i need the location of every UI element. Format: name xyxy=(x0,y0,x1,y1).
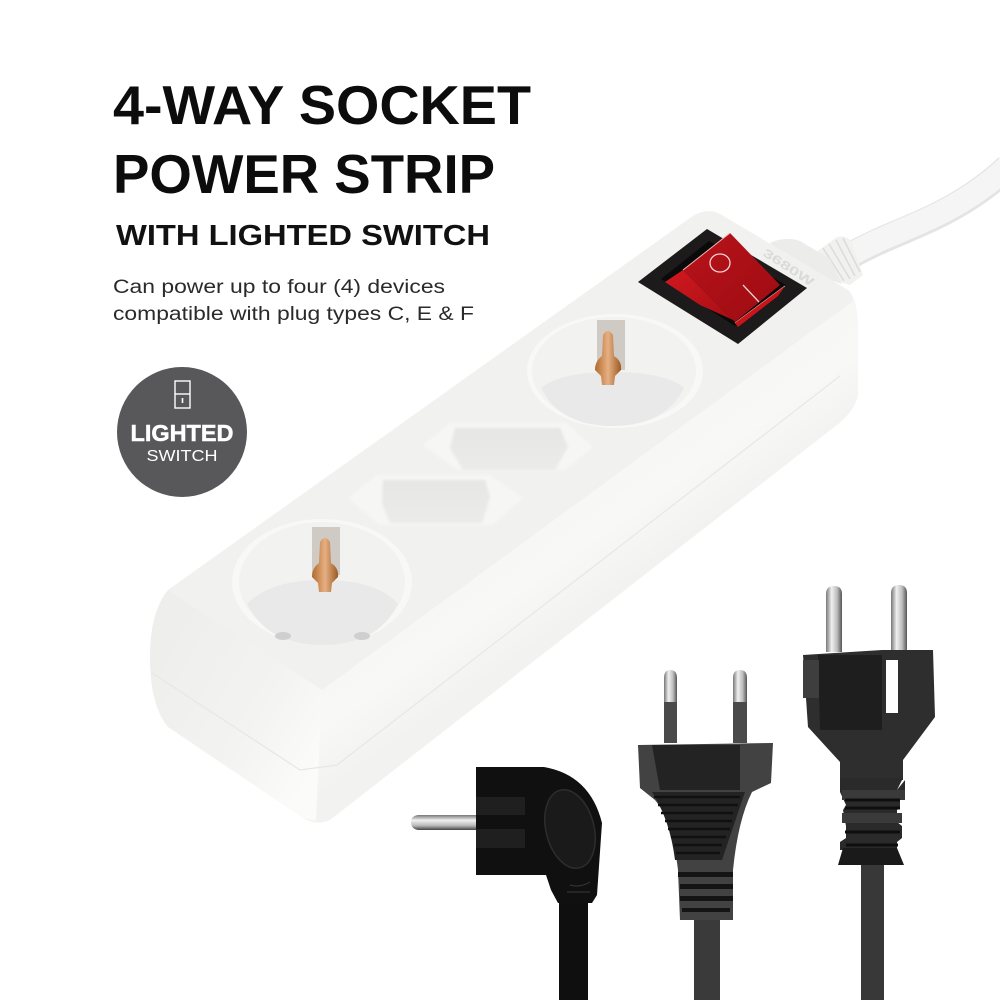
title xyxy=(113,74,531,205)
angled plug xyxy=(411,767,603,1000)
description text: compatible with plug types C, E & F xyxy=(113,304,474,325)
two-pin plug cord xyxy=(694,920,720,1000)
strip end face xyxy=(150,590,322,821)
subtitle: WITH LIGHTED SWITCH xyxy=(116,220,490,252)
power strip body xyxy=(150,211,858,823)
angled plug pin xyxy=(411,815,476,830)
title: 4-WAY SOCKET xyxy=(113,74,531,136)
description text xyxy=(113,277,474,325)
text: wattage rating: 3680W xyxy=(760,246,817,290)
rocker xyxy=(683,233,780,322)
lower socket xyxy=(232,519,412,645)
ground slot xyxy=(886,660,898,713)
description text: Can power up to four (4) devices xyxy=(113,277,445,298)
badge: lighted switch xyxy=(117,367,247,497)
two-pin plug pins xyxy=(664,670,747,743)
middle slot upper xyxy=(423,423,593,470)
title: POWER STRIP xyxy=(113,143,495,205)
two-pin plug xyxy=(638,670,773,1000)
middle slot lower xyxy=(348,475,523,525)
cord strain relief xyxy=(815,236,863,285)
switch bezel xyxy=(638,229,807,344)
badge: lighted switch: SWITCH xyxy=(146,448,218,465)
strain relief xyxy=(838,778,905,865)
upper socket xyxy=(527,314,703,428)
switch xyxy=(638,229,817,344)
strip top face xyxy=(168,211,853,690)
badge: lighted switch: LIGHTED xyxy=(130,420,234,446)
angled plug cord xyxy=(559,903,588,1000)
grounded plug pins xyxy=(826,585,907,652)
rocker I mark xyxy=(743,285,759,302)
grounded plug xyxy=(803,585,935,1000)
rocker O mark xyxy=(710,254,730,272)
grounded plug cord xyxy=(861,865,884,1000)
icon: switch xyxy=(175,381,190,408)
white power cord xyxy=(770,166,1000,285)
